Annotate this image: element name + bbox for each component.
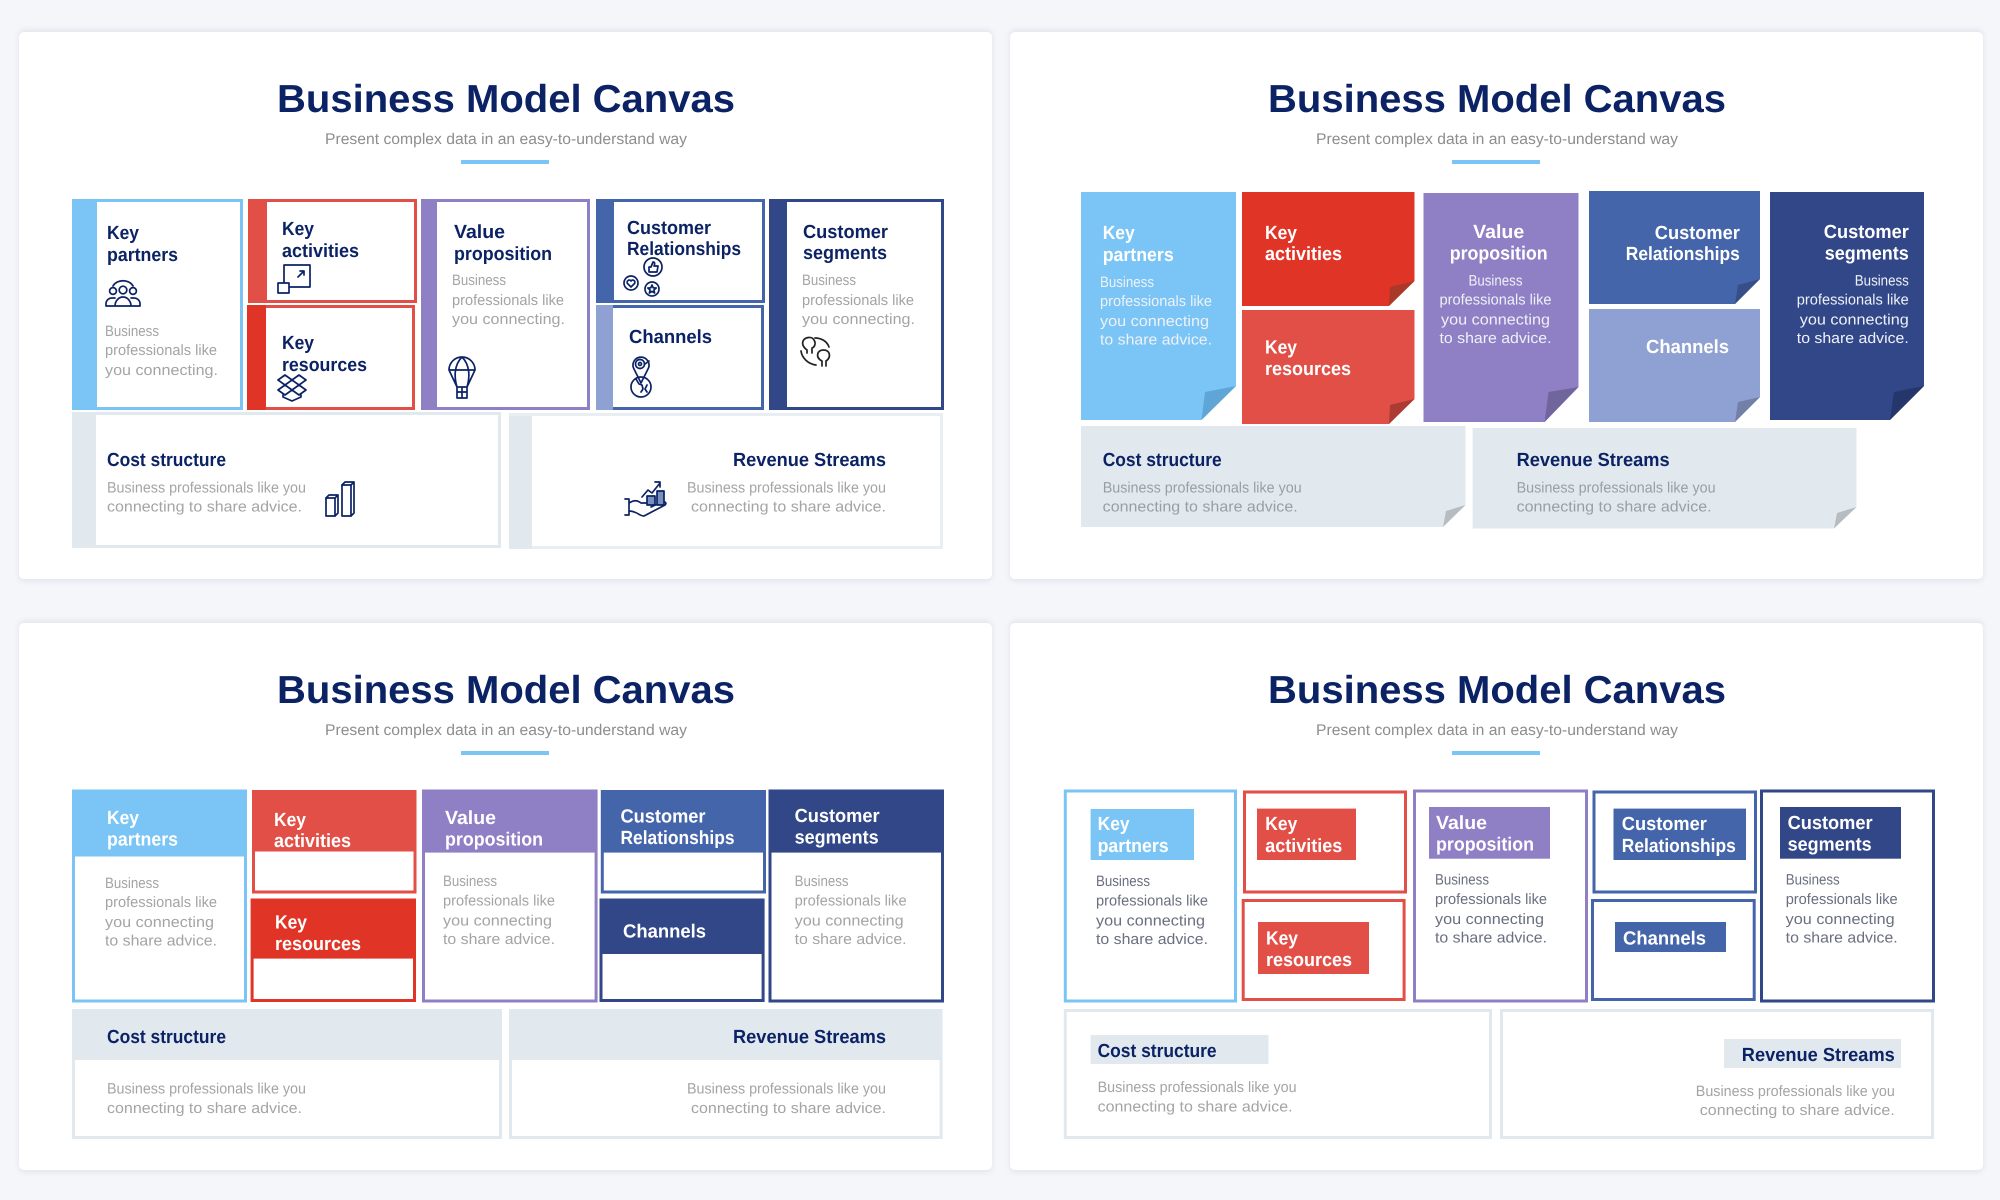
- heading: customer segments: Customer: [1824, 222, 1909, 243]
- heading: key partners: Key: [107, 223, 139, 244]
- panel: value proposition: [1424, 193, 1578, 422]
- icon: target pin and globe: [631, 357, 651, 397]
- body text: [1517, 480, 1716, 516]
- heading: customer segments: segments: [795, 827, 879, 848]
- body text: [443, 873, 555, 948]
- underline accent: [461, 160, 549, 164]
- panel: key activities: [1244, 792, 1406, 892]
- body text: professionals like: [443, 892, 555, 909]
- heading: key activities: activities: [282, 241, 359, 262]
- panel: key activities: [252, 790, 416, 894]
- panel: revenue streams: [1502, 1010, 1932, 1138]
- body text: professionals like: [105, 342, 217, 359]
- slide 3: canvas with header bands: [19, 621, 992, 1172]
- heading: value proposition: [454, 222, 552, 265]
- title: Business Model Canvas: [1268, 78, 1726, 121]
- heading: customer relationships: Relationships: [1622, 836, 1736, 857]
- heading: customer segments: [803, 222, 889, 264]
- heading: customer relationships: Customer: [1622, 814, 1707, 835]
- body text: connecting to share advice.: [1103, 498, 1298, 516]
- body text: [687, 480, 886, 516]
- heading: key resources: [1265, 338, 1351, 380]
- heading: key partners: partners: [1103, 245, 1174, 266]
- heading: customer relationships: Customer: [620, 807, 706, 828]
- body text: you connecting: [443, 912, 552, 929]
- body text: Business professionals like you: [107, 1081, 306, 1098]
- body text: to share advice.: [1100, 332, 1212, 348]
- body text: Business: [802, 272, 856, 289]
- heading: customer segments: segments: [803, 243, 887, 264]
- body text: professionals like: [1100, 293, 1212, 310]
- body text: you connecting.: [452, 311, 565, 328]
- heading: key resources: Key: [282, 333, 314, 354]
- body text: connecting to share advice.: [691, 1100, 886, 1117]
- body text: [1440, 272, 1552, 347]
- body text: you connecting: [1800, 312, 1909, 328]
- body text: [802, 272, 915, 328]
- panel: customer segments: [1770, 192, 1924, 420]
- icon: hand with coins: [625, 482, 666, 516]
- heading: revenue streams: Revenue Streams: [1742, 1045, 1895, 1066]
- body text: you connecting.: [802, 311, 915, 328]
- body text: [1797, 272, 1909, 347]
- heading: cost structure: Cost structure: [1103, 450, 1222, 471]
- body text: Business professionals like you: [687, 480, 886, 496]
- body text: you connecting: [1100, 313, 1209, 330]
- body text: [1096, 873, 1208, 948]
- heading: value proposition: Value: [454, 222, 505, 243]
- heading: key partners: partners: [1098, 836, 1169, 857]
- heading: customer relationships: Relationships: [1626, 244, 1740, 265]
- panel: channels: [600, 898, 765, 1002]
- body text: Business: [105, 875, 159, 892]
- heading: customer segments: [795, 806, 880, 848]
- body text: Business: [1435, 872, 1489, 889]
- panel: key resources: [1243, 900, 1404, 1000]
- body text: [1435, 872, 1547, 946]
- body text: [795, 873, 907, 948]
- panel: key partners: [1081, 192, 1236, 420]
- body text: you connecting: [1441, 312, 1550, 328]
- panel: value proposition: [1414, 791, 1586, 1001]
- subtitle: Present complex data in an easy-to-understand way: [1316, 722, 1678, 739]
- heading: customer segments: Customer: [795, 806, 880, 827]
- panel: cost structure: [72, 412, 501, 548]
- panel: channels: [1589, 309, 1760, 422]
- heading: revenue streams: Revenue Streams: [733, 450, 886, 471]
- body text: to share advice.: [1435, 930, 1547, 946]
- body text: connecting to share advice.: [691, 498, 886, 516]
- body text: Business: [443, 873, 497, 890]
- heading: key partners: Key: [1103, 223, 1135, 244]
- icon: group of people: [106, 281, 140, 306]
- heading: key activities: Key: [282, 219, 314, 240]
- panel: key activities: [248, 199, 417, 303]
- body text: to share advice.: [1797, 330, 1909, 347]
- heading: customer segments: segments: [1788, 834, 1872, 855]
- body text: [1103, 480, 1302, 516]
- icon: hot-air balloon: [449, 357, 475, 398]
- heading: key resources: [282, 333, 367, 376]
- panel: key partners: [1065, 791, 1236, 1001]
- body text: you connecting: [1435, 911, 1544, 928]
- heading: key resources: resources: [282, 355, 367, 376]
- panel: revenue streams: [1473, 428, 1856, 528]
- icon: boxes: [278, 375, 306, 401]
- heading: key resources: resources: [275, 934, 361, 955]
- heading: value proposition: [1450, 222, 1548, 264]
- heading: customer segments: Customer: [803, 222, 889, 243]
- heading: customer relationships: Customer: [1655, 223, 1740, 244]
- title: Business Model Canvas: [277, 669, 735, 712]
- underline accent: [1452, 751, 1540, 755]
- panel: key activities: [1242, 192, 1414, 306]
- title: Business Model Canvas: [277, 78, 735, 121]
- panel: value proposition: [421, 199, 590, 410]
- heading: revenue streams: Revenue Streams: [1517, 450, 1670, 471]
- body text: [1786, 872, 1898, 946]
- heading: key partners: [1103, 223, 1174, 266]
- body text: [1098, 1079, 1297, 1115]
- heading: customer relationships: [620, 807, 734, 849]
- heading: cost structure: Cost structure: [107, 450, 226, 471]
- heading: channels: Channels: [623, 922, 706, 942]
- body text: [452, 272, 565, 328]
- heading: key resources: Key: [1265, 338, 1297, 359]
- heading: key activities: activities: [1265, 244, 1342, 265]
- panel: key resources: [1242, 310, 1414, 424]
- heading: customer relationships: [627, 218, 741, 260]
- body text: [107, 1081, 306, 1117]
- panel: channels: [1592, 900, 1754, 1000]
- body text: connecting to share advice.: [1517, 498, 1712, 516]
- body text: you connecting: [105, 914, 214, 931]
- body text: Business: [1855, 272, 1909, 290]
- heading: customer segments: Customer: [1788, 813, 1873, 834]
- underline accent: [1452, 160, 1540, 164]
- body text: professionals like: [1096, 892, 1208, 909]
- heading: key resources: [1266, 928, 1352, 971]
- subtitle: Present complex data in an easy-to-understand way: [325, 131, 687, 148]
- heading: key resources: [275, 912, 361, 955]
- body text: Business professionals like you: [1098, 1079, 1297, 1096]
- heading: value proposition: [1436, 813, 1534, 855]
- heading: customer relationships: Relationships: [620, 828, 734, 849]
- body text: Business professionals like you: [1517, 480, 1716, 496]
- heading: cost structure: Cost structure: [107, 1027, 226, 1048]
- heading: channels: Channels: [1623, 928, 1706, 949]
- panel: customer relationships: [1594, 792, 1756, 892]
- heading: customer segments: [1788, 813, 1873, 855]
- body text: Business: [1096, 873, 1150, 890]
- body text: connecting to share advice.: [107, 1100, 302, 1117]
- panel: cost structure: [1065, 1010, 1490, 1138]
- heading: customer segments: [1824, 222, 1909, 264]
- body text: professionals like: [1786, 891, 1898, 908]
- subtitle: Present complex data in an easy-to-understand way: [1316, 131, 1678, 148]
- slide 4: canvas with outlined boxes and label tags: [1010, 621, 1983, 1172]
- icon: expand arrow: [278, 265, 310, 293]
- body text: [105, 323, 218, 379]
- body text: you connecting: [795, 912, 904, 929]
- body text: Business: [105, 323, 159, 340]
- panel: key resources: [251, 898, 416, 1002]
- heading: key activities: [1265, 223, 1342, 265]
- subtitle: Present complex data in an easy-to-understand way: [325, 722, 687, 739]
- heading: channels: Channels: [1646, 337, 1729, 358]
- body text: Business: [1786, 872, 1840, 889]
- heading: channels: Channels: [629, 327, 712, 348]
- heading: key resources: resources: [1266, 950, 1352, 971]
- heading: value proposition: proposition: [445, 830, 543, 851]
- body text: to share advice.: [1096, 931, 1208, 948]
- body text: connecting to share advice.: [1700, 1102, 1895, 1119]
- slide 1: canvas with side bands and icons: [19, 30, 992, 581]
- heading: key activities: [274, 810, 351, 852]
- icon: two heads: [801, 337, 829, 366]
- heading: key partners: [107, 223, 178, 266]
- heading: value proposition: [445, 808, 543, 851]
- body text: [687, 1081, 886, 1117]
- body text: to share advice.: [1786, 930, 1898, 946]
- panel: customer relationships: [601, 790, 766, 894]
- body text: professionals like: [802, 292, 914, 309]
- title: Business Model Canvas: [1268, 669, 1726, 712]
- body text: Business professionals like you: [687, 1081, 886, 1098]
- slide 2: canvas with folded-corner notes: [1010, 30, 1983, 581]
- heading: key resources: Key: [275, 912, 307, 933]
- body text: professionals like: [1435, 891, 1547, 908]
- body text: you connecting.: [105, 362, 218, 379]
- heading: value proposition: proposition: [454, 244, 552, 265]
- body text: professionals like: [452, 292, 564, 309]
- heading: key activities: [1265, 814, 1342, 857]
- body text: to share advice.: [443, 931, 555, 948]
- body text: Business: [452, 272, 506, 289]
- heading: value proposition: proposition: [1450, 244, 1548, 264]
- panel: channels: [596, 305, 764, 410]
- body text: [1100, 274, 1212, 348]
- panel: customer segments: [768, 790, 944, 1002]
- panel: key resources: [247, 305, 415, 410]
- icon: bars: [326, 482, 354, 516]
- body text: you connecting: [1786, 911, 1895, 928]
- heading: revenue streams: Revenue Streams: [733, 1027, 886, 1048]
- heading: key activities: Key: [1265, 814, 1298, 835]
- underline accent: [461, 751, 549, 755]
- panel: customer relationships: [1589, 191, 1760, 304]
- heading: key activities: Key: [274, 810, 306, 831]
- panel: cost structure: [72, 1009, 502, 1139]
- heading: value proposition: Value: [1436, 813, 1487, 834]
- heading: key partners: Key: [107, 808, 139, 829]
- body text: professionals like: [1440, 292, 1552, 309]
- body text: to share advice.: [795, 931, 907, 948]
- body text: [1696, 1083, 1895, 1119]
- heading: customer relationships: [1626, 223, 1740, 265]
- body text: professionals like: [105, 894, 217, 911]
- panel: key partners: [72, 790, 247, 1002]
- heading: key partners: [1098, 814, 1169, 857]
- body text: Business professionals like you: [1696, 1083, 1895, 1100]
- body text: [107, 480, 306, 516]
- panel: value proposition: [422, 790, 598, 1002]
- heading: customer relationships: [1622, 814, 1736, 857]
- heading: value proposition: Value: [1473, 222, 1524, 243]
- body text: Business professionals like you: [1103, 480, 1302, 496]
- heading: value proposition: proposition: [1436, 834, 1534, 855]
- heading: customer relationships: Relationships: [627, 239, 741, 260]
- icon: thumb heart star: [624, 258, 662, 296]
- heading: key activities: Key: [1265, 223, 1297, 244]
- body text: to share advice.: [105, 933, 217, 950]
- heading: key partners: partners: [107, 245, 178, 266]
- heading: customer segments: segments: [1825, 244, 1909, 264]
- heading: customer relationships: Customer: [627, 218, 712, 239]
- heading: key partners: partners: [107, 830, 178, 851]
- body text: professionals like: [1797, 292, 1909, 309]
- panel: customer segments: [769, 199, 944, 410]
- body text: Business: [795, 873, 849, 890]
- panel: cost structure: [1081, 426, 1466, 527]
- heading: key partners: [107, 808, 178, 851]
- panel: customer segments: [1762, 791, 1934, 1001]
- panel: revenue streams: [509, 413, 943, 549]
- body text: [105, 875, 217, 950]
- body text: you connecting: [1096, 912, 1205, 929]
- body text: Business professionals like you: [107, 480, 306, 496]
- panel: revenue streams: [509, 1009, 943, 1139]
- heading: key resources: resources: [1265, 359, 1351, 380]
- body text: connecting to share advice.: [1098, 1098, 1293, 1115]
- body text: connecting to share advice.: [107, 498, 302, 516]
- heading: key resources: Key: [1266, 928, 1298, 949]
- heading: cost structure: Cost structure: [1098, 1041, 1217, 1062]
- body text: professionals like: [795, 892, 907, 909]
- body text: Business: [1100, 274, 1154, 291]
- heading: key activities: activities: [274, 831, 351, 852]
- heading: key activities: activities: [1265, 836, 1342, 857]
- heading: value proposition: Value: [445, 808, 496, 829]
- panel: customer relationships: [596, 199, 765, 303]
- heading: key activities: [282, 219, 359, 262]
- panel: key partners: [72, 199, 243, 410]
- heading: key partners: Key: [1098, 814, 1130, 835]
- body text: to share advice.: [1440, 330, 1552, 347]
- body text: Business: [1468, 272, 1522, 290]
